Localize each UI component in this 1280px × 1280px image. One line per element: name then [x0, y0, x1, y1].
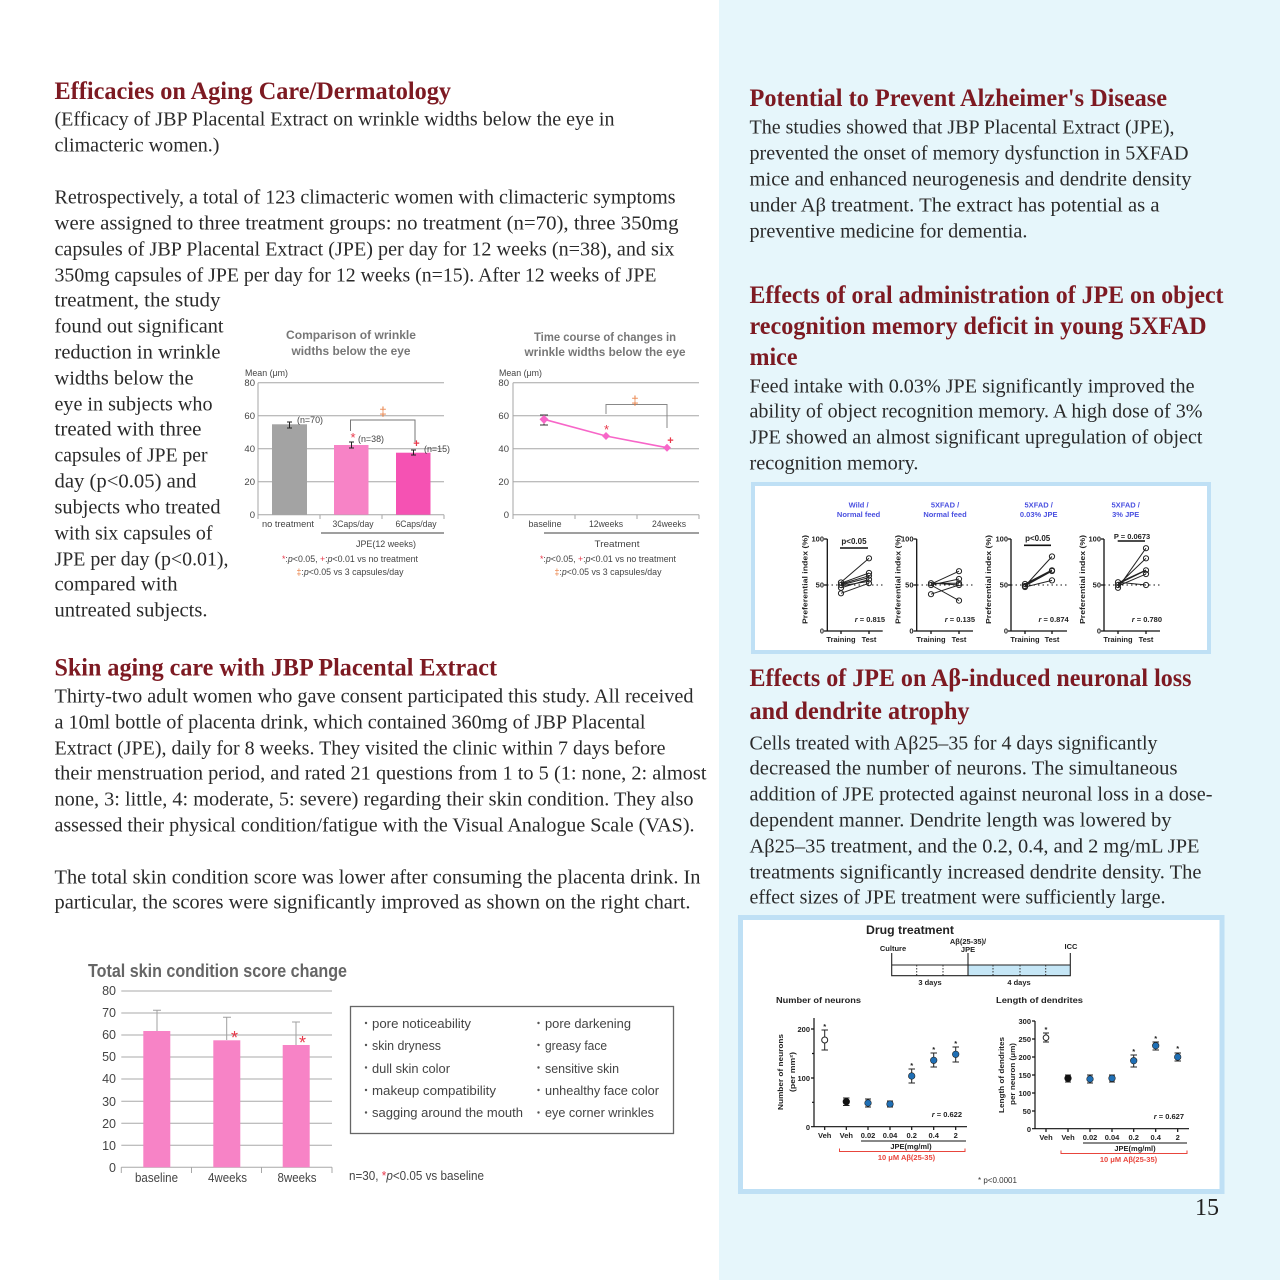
bar chart: total skin condition score change: 70: [102, 1006, 116, 1020]
heading: Alzheimer's: Potential to Prevent Alzheimer's Disease: [750, 85, 1167, 112]
text block: skin aging study: [54, 686, 707, 914]
text block: skin aging study: particular, the scores were significantly improved as shown on the right chart.: [54, 892, 690, 914]
legend box: skin condition items: dull skin color: [372, 1062, 450, 1076]
chart: length of dendrites: 0: [1027, 1125, 1031, 1134]
text block: object recognition: Feed intake with 0.03% JPE significantly improved the: [750, 375, 1194, 397]
legend box: skin condition items: sagging around the mouth: [372, 1106, 523, 1120]
text block: skin aging study: assessed their physical condition/fatigue with the Visual Analogue Scale (VAS).: [54, 814, 694, 836]
heading: aging care: Efficacies on Aging Care/Dermatology: [54, 78, 451, 105]
bar chart: comparison of wrinkle widths: *: [350, 430, 356, 445]
chart: number of neurons: *: [823, 1022, 826, 1031]
figure panel: object recognition charts: [753, 484, 1209, 652]
legend box: skin condition items: pore noticeability: [372, 1017, 472, 1031]
chart: length of dendrites: 10 μM Aβ(25-35): [1100, 1155, 1158, 1164]
text block: skin aging study: a 10ml bottle of placenta drink, which contained 360mg of JBP Placental: [54, 712, 646, 734]
chart: wild normal feed: 100: [811, 534, 824, 544]
chart: 5XFAD normal feed: 5XFAD /: [931, 500, 960, 510]
chart: number of neurons: JPE(mg/ml): [890, 1142, 932, 1151]
footnote: significance: * p<0.0001: [978, 1176, 1017, 1185]
chart: wild normal feed: Preferential index (%): [800, 534, 810, 624]
heading: neuronal loss: and dendrite atrophy: [750, 698, 970, 725]
chart: length of dendrites: *: [1045, 1025, 1048, 1034]
chart title: Total skin condition score change: [88, 961, 347, 981]
text block: wrinkle study: capsules of JPE per: [54, 444, 208, 466]
chart: 5XFAD normal feed: 0: [909, 626, 914, 636]
heading: skin aging care: Skin aging care with JBP Placental Extract: [54, 654, 498, 682]
bar chart: total skin condition score change: 40: [102, 1072, 116, 1086]
chart: 5XFAD normal feed: r = 0.135: [945, 615, 975, 624]
chart: length of dendrites: *: [1154, 1034, 1157, 1043]
heading: neuronal loss: [750, 665, 1192, 725]
text block: wrinkle study: Retrospectively, a total of 123 climacteric women with climacteric symptoms: [54, 186, 676, 208]
text block: wrinkle study: day (p<0.05) and: [54, 470, 196, 492]
bar chart: total skin condition score change: [88, 961, 347, 1185]
bar chart: total skin condition score change: 30: [102, 1095, 116, 1109]
legend box: skin condition items: pore darkening: [545, 1017, 631, 1031]
chart: 5XFAD normal feed: Preferential index (%): [894, 534, 902, 624]
chart: 5XFAD 0.03% JPE: r = 0.874: [1038, 615, 1070, 624]
chart: number of neurons: 200: [797, 1025, 810, 1034]
chart: length of dendrites: 0.04: [1105, 1133, 1120, 1142]
text block: neuronal loss: addition of JPE protected against neuronal loss in a dose-: [750, 784, 1213, 806]
chart: number of neurons: 0.2: [906, 1131, 917, 1140]
chart: 5XFAD normal feed: Training: [916, 635, 946, 644]
line chart: time course of wrinkle widths: [498, 330, 699, 578]
chart: wild normal feed: [800, 500, 885, 644]
diagram: drug treatment timeline: 4 days: [1007, 978, 1031, 987]
chart: length of dendrites: Length of dendrites: [997, 1037, 1006, 1113]
text block: object recognition: JPE showed an almost significant upregulation of object: [750, 426, 1203, 448]
chart: number of neurons: *: [910, 1061, 913, 1070]
text block: Alzheimer's: The studies showed that JBP Placental Extract (JPE),: [750, 116, 1174, 138]
chart: 5XFAD 3% JPE: 5XFAD /: [1112, 500, 1141, 510]
chart: number of neurons: 0.4: [928, 1131, 940, 1140]
text block: wrinkle study: JPE per day (p<0.01),: [54, 548, 228, 570]
chart: 5XFAD normal feed: 50: [905, 580, 914, 590]
text block: wrinkle study: (Efficacy of JBP Placental Extract on wrinkle widths below the eye in: [54, 108, 614, 130]
diagram: drug treatment timeline: Culture: [880, 944, 906, 953]
chart: length of dendrites: Veh: [1061, 1133, 1075, 1142]
chart: 5XFAD normal feed: [894, 500, 975, 644]
text block: object recognition: [750, 375, 1203, 474]
chart: length of dendrites: *: [1132, 1047, 1135, 1056]
chart: number of neurons: 2: [954, 1131, 958, 1140]
chart: wild normal feed: Wild /: [849, 500, 869, 510]
chart: number of neurons: Number of neurons: [776, 996, 862, 1005]
bar chart: comparison of wrinkle widths: 80: [244, 378, 255, 389]
diagram: drug treatment timeline: [866, 923, 1078, 987]
chart: 5XFAD 3% JPE: 3% JPE: [1112, 510, 1139, 519]
text block: neuronal loss: treatments significantly increased dendrite density. The: [750, 862, 1202, 884]
diagram: drug treatment timeline: 3 days: [918, 978, 942, 987]
text block: skin aging study: The total skin condition score was lower after consuming the placenta drink. In: [54, 866, 700, 888]
legend box: skin condition items: unhealthy face color: [545, 1084, 659, 1098]
chart: wild normal feed: 0: [820, 626, 824, 636]
legend box: skin condition items: skin dryness: [372, 1039, 441, 1053]
text block: neuronal loss: decreased the number of neurons. The simultaneous: [750, 758, 1178, 780]
text block: wrinkle study: eye in subjects who: [54, 394, 212, 416]
chart: 5XFAD 0.03% JPE: Training: [1010, 635, 1040, 644]
text block: wrinkle study: were assigned to three treatment groups: no treatment (n=70), three 350mg: [54, 212, 678, 234]
chart: 5XFAD 0.03% JPE: 50: [1000, 580, 1008, 590]
line chart: time course of wrinkle widths: 24weeks: [652, 519, 686, 530]
chart: length of dendrites: 0.4: [1150, 1133, 1162, 1142]
line chart: time course of wrinkle widths: Mean (μm): [499, 368, 542, 379]
bar chart: total skin condition score change: 10: [102, 1139, 116, 1153]
text block: neuronal loss: effect sizes of JPE treatment were sufficiently large.: [750, 886, 1166, 908]
chart: number of neurons: 0.02: [861, 1131, 875, 1140]
chart: 5XFAD 3% JPE: Preferential index (%): [1078, 534, 1087, 624]
bar chart: total skin condition score change: 80: [102, 984, 116, 998]
bar chart: comparison of wrinkle widths: 6Caps/day: [396, 519, 437, 530]
line chart: time course of wrinkle widths: 60: [498, 411, 509, 422]
line chart: time course of wrinkle widths: ‡: [631, 393, 639, 408]
diagram: drug treatment timeline: JPE: [961, 945, 975, 954]
chart: length of dendrites: per neuron (μm): [1008, 1042, 1017, 1105]
bar chart: comparison of wrinkle widths: 20: [244, 477, 255, 488]
chart: 5XFAD 0.03% JPE: [984, 500, 1070, 644]
chart: 5XFAD 3% JPE: Training: [1103, 635, 1133, 644]
text block: wrinkle study: untreated subjects.: [54, 600, 208, 622]
chart: 5XFAD normal feed: 100: [901, 534, 914, 544]
chart: 5XFAD 3% JPE: r = 0.780: [1132, 615, 1162, 624]
bar chart: comparison of wrinkle widths: 40: [244, 444, 255, 455]
heading: object recognition: mice: [750, 344, 798, 371]
text block: wrinkle study: found out significant: [54, 316, 224, 338]
line chart: time course of wrinkle widths: 40: [498, 444, 509, 455]
text block: wrinkle study: subjects who treated: [54, 496, 220, 518]
text block: Alzheimer's: under Aβ treatment. The extract has potential as a: [750, 194, 1160, 216]
chart: number of neurons: Veh: [840, 1131, 853, 1140]
line chart: time course of wrinkle widths: 0: [504, 510, 509, 521]
chart title: widths below the eye: [291, 344, 411, 358]
text block: skin aging study: Extract (JPE), daily for 8 weeks. They visited the clinic within 7 days before: [54, 738, 666, 760]
chart: number of neurons: 0.04: [883, 1131, 898, 1140]
chart: number of neurons: *: [932, 1045, 935, 1054]
text block: skin aging study: none, 3: little, 4: moderate, 5: severe) regarding their skin condition. They also: [54, 788, 694, 810]
chart: 5XFAD 0.03% JPE: p<0.05: [1025, 534, 1051, 543]
chart: length of dendrites: 50: [1023, 1107, 1031, 1116]
chart: 5XFAD 3% JPE: 100: [1088, 534, 1101, 544]
chart: length of dendrites: 100: [1018, 1089, 1031, 1098]
chart: length of dendrites: 200: [1018, 1053, 1031, 1062]
footnote: skin chart: n=30, *p<0.05 vs baseline: [349, 1169, 484, 1183]
text block: skin aging study: Thirty-two adult women who gave consent participated this study. All received: [54, 686, 694, 708]
text block: neuronal loss: dependent manner. Dendrite length was lowered by: [750, 810, 1172, 832]
chart: length of dendrites: *: [1176, 1044, 1179, 1053]
line chart: time course of wrinkle widths: +: [667, 435, 674, 447]
heading: object recognition: [750, 282, 1224, 371]
legend box: skin condition items: eye corner wrinkles: [545, 1106, 654, 1120]
text block: wrinkle study: treatment, the study: [54, 290, 221, 312]
chart: wild normal feed: 50: [816, 580, 824, 590]
chart: length of dendrites: 0.2: [1128, 1133, 1139, 1142]
chart: 5XFAD 3% JPE: 0: [1097, 626, 1101, 636]
chart: 5XFAD normal feed: Test: [952, 635, 967, 644]
chart: number of neurons: (per mm²): [788, 1051, 797, 1092]
text block: neuronal loss: Aβ25–35 treatment, and the 0.2, 0.4, and 2 mg/mL JPE: [750, 836, 1200, 858]
bar chart: comparison of wrinkle widths: Mean (μm): [245, 368, 288, 379]
chart: 5XFAD 0.03% JPE: 100: [995, 534, 1008, 544]
chart: length of dendrites: Veh: [1039, 1133, 1053, 1142]
chart: length of dendrites: 300: [1018, 1017, 1031, 1026]
bar chart: comparison of wrinkle widths: (n=70): [297, 415, 323, 426]
chart: 5XFAD 3% JPE: [1078, 500, 1162, 644]
text block: Alzheimer's: mice and enhanced neurogenesis and dendrite density: [750, 168, 1192, 190]
text block: object recognition: recognition memory.: [750, 452, 918, 474]
chart: length of dendrites: 2: [1176, 1133, 1180, 1142]
chart: length of dendrites: Length of dendrites: [996, 996, 1084, 1005]
bar chart: comparison of wrinkle widths: +: [413, 438, 420, 450]
chart title: [286, 328, 416, 358]
text block: Alzheimer's: [750, 116, 1192, 242]
bar chart: comparison of wrinkle widths: 60: [244, 411, 255, 422]
chart: 5XFAD 0.03% JPE: 5XFAD /: [1025, 500, 1054, 510]
bar chart: total skin condition score change: *: [299, 1033, 306, 1053]
chart: number of neurons: Veh: [818, 1131, 832, 1140]
chart: 5XFAD 3% JPE: 50: [1093, 580, 1101, 590]
chart: number of neurons: 10 μM Aβ(25-35): [878, 1153, 936, 1162]
chart: length of dendrites: r = 0.627: [1154, 1112, 1184, 1121]
chart: 5XFAD 0.03% JPE: 0.03% JPE: [1020, 510, 1057, 519]
chart: 5XFAD 0.03% JPE: Test: [1045, 635, 1060, 644]
chart: 5XFAD normal feed: Normal feed: [923, 510, 967, 519]
chart title: Comparison of wrinkle: [286, 328, 416, 342]
text block: object recognition: ability of object recognition memory. A high dose of 3%: [750, 400, 1202, 422]
chart: 5XFAD 0.03% JPE: Preferential index (%): [984, 534, 993, 624]
line chart: time course of wrinkle widths: *:p<0.05, +:p<0.01 vs no treatment: [540, 554, 676, 565]
bar chart: comparison of wrinkle widths: 0: [250, 510, 255, 521]
text block: wrinkle study: widths below the: [54, 368, 194, 390]
text block: wrinkle study: climacteric women.): [54, 134, 220, 156]
heading: object recognition: recognition memory deficit in young 5XFAD: [750, 313, 1206, 340]
chart: wild normal feed: p<0.05: [841, 537, 867, 546]
chart: length of dendrites: 250: [1018, 1035, 1031, 1044]
line chart: time course of wrinkle widths: *: [604, 422, 609, 437]
chart: number of neurons: r = 0.622: [932, 1110, 962, 1119]
diagram: drug treatment timeline: Aβ(25-35)/: [950, 937, 987, 946]
text block: skin aging study: their menstruation period, and rated 21 questions from 1 to 5 (1: none, 2: almost: [54, 762, 707, 784]
bar chart: total skin condition score change: 60: [102, 1028, 116, 1042]
text block: wrinkle study: treated with three: [54, 418, 202, 440]
chart: length of dendrites: 150: [1018, 1071, 1031, 1080]
bar chart: comparison of wrinkle widths: JPE(12 weeks): [356, 539, 416, 550]
bar chart: comparison of wrinkle widths: ‡: [379, 404, 387, 419]
bar chart: comparison of wrinkle widths: (n=15): [424, 444, 450, 455]
heading: object recognition: Effects of oral administration of JPE on object: [750, 282, 1224, 309]
text block: neuronal loss: [750, 732, 1213, 908]
chart: 5XFAD 0.03% JPE: 0: [1004, 626, 1008, 636]
chart: wild normal feed: Test: [862, 635, 877, 644]
chart title: wrinkle widths below the eye: [524, 345, 686, 359]
chart: length of dendrites: JPE(mg/ml): [1114, 1144, 1156, 1153]
bar chart: total skin condition score change: 8weeks: [278, 1171, 316, 1185]
bar chart: comparison of wrinkle widths: ‡:p<0.05 vs 3 capsules/day: [296, 567, 404, 578]
right column background panel: [719, 0, 1280, 1280]
chart: number of neurons: 0: [806, 1123, 810, 1132]
chart: number of neurons: 100: [797, 1074, 810, 1083]
legend box: skin condition items: [350, 1006, 674, 1134]
bar chart: comparison of wrinkle widths: 3Caps/day: [332, 519, 374, 530]
bar chart: total skin condition score change: baseline: [135, 1171, 178, 1185]
bar chart: comparison of wrinkle widths: (n=38): [358, 434, 384, 445]
line chart: time course of wrinkle widths: Treatment: [594, 539, 640, 550]
text block: wrinkle study: with six capsules of: [54, 522, 213, 544]
chart title: [524, 330, 686, 359]
text block: Alzheimer's: prevented the onset of memory dysfunction in 5XFAD: [750, 142, 1188, 164]
figure panel: neuron and dendrite charts: [740, 918, 1222, 1192]
bar chart: comparison of wrinkle widths: *:p<0.05, +:p<0.01 vs no treatment: [282, 554, 418, 565]
chart: wild normal feed: r = 0.815: [855, 615, 885, 624]
bar chart: total skin condition score change: 0: [109, 1161, 116, 1175]
chart title: Time course of changes in: [534, 330, 676, 344]
text block: wrinkle study: 350mg capsules of JPE per day for 12 weeks (n=15). After 12 weeks of JPE: [54, 264, 656, 286]
text block: neuronal loss: Cells treated with Aβ25–35 for 4 days significantly: [750, 732, 1158, 754]
legend box: skin condition items: greasy face: [545, 1039, 607, 1053]
line chart: time course of wrinkle widths: 20: [498, 477, 509, 488]
text block: wrinkle study: compared with: [54, 574, 178, 596]
chart: number of neurons: [776, 996, 967, 1162]
chart: 5XFAD 3% JPE: P = 0.0673: [1114, 532, 1150, 541]
bar chart: total skin condition score change: 4weeks: [208, 1171, 247, 1185]
chart: wild normal feed: Normal feed: [837, 510, 881, 519]
heading: neuronal loss: Effects of JPE on Aβ-induced neuronal loss: [750, 665, 1192, 692]
bar chart: comparison of wrinkle widths: no treatment: [262, 519, 314, 530]
line chart: time course of wrinkle widths: baseline: [528, 519, 562, 530]
chart: 5XFAD 3% JPE: Test: [1139, 635, 1154, 644]
bar chart: total skin condition score change: 50: [102, 1050, 116, 1064]
text block: wrinkle study: reduction in wrinkle: [54, 342, 220, 364]
line chart: time course of wrinkle widths: 12weeks: [589, 519, 623, 530]
chart: wild normal feed: Training: [826, 635, 856, 644]
text block: Alzheimer's: preventive medicine for dementia.: [750, 220, 1028, 242]
chart: number of neurons: *: [954, 1039, 957, 1048]
bar chart: total skin condition score change: 20: [102, 1117, 116, 1131]
line chart: time course of wrinkle widths: 80: [498, 378, 509, 389]
chart: length of dendrites: 0.02: [1083, 1133, 1097, 1142]
diagram: drug treatment timeline: ICC: [1065, 942, 1078, 951]
legend box: skin condition items: makeup compatibility: [372, 1084, 497, 1098]
bar chart: total skin condition score change: *: [231, 1028, 238, 1048]
diagram: drug treatment timeline: Drug treatment: [866, 923, 954, 937]
chart: number of neurons: Number of neurons: [776, 1034, 785, 1110]
line chart: time course of wrinkle widths: ‡:p<0.05 vs 3 capsules/day: [554, 567, 662, 578]
text block: wrinkle study: capsules of JBP Placental Extract (JPE) per day for 12 weeks (n=38), and six: [54, 238, 674, 260]
page number: 15: [1195, 1195, 1219, 1221]
bar chart: comparison of wrinkle widths: [244, 328, 450, 578]
text block: wrinkle study: [54, 108, 678, 622]
legend box: skin condition items: sensitive skin: [545, 1062, 619, 1076]
chart: length of dendrites: [996, 996, 1189, 1164]
